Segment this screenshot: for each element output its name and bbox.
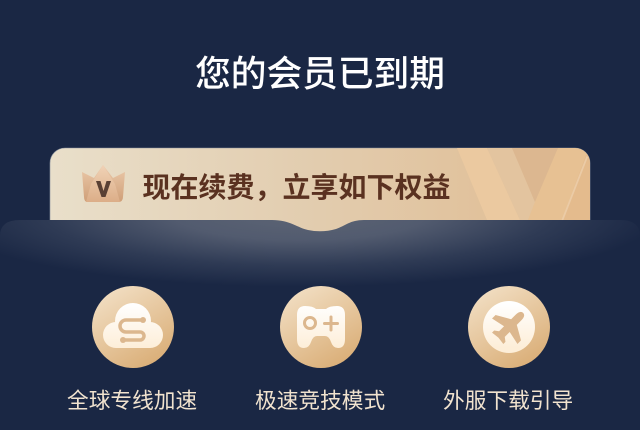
banner V decoration xyxy=(457,148,590,221)
title: 您的会员已到期 xyxy=(195,54,445,94)
icon: gamepad circle xyxy=(280,286,362,368)
icon: airplane circle xyxy=(468,286,550,368)
label: global lines: 全球专线加速 xyxy=(67,388,197,413)
label: download guide: 外服下载引导 xyxy=(443,388,573,413)
banner heading: 现在续费，立享如下权益 xyxy=(142,172,451,203)
icon: crown xyxy=(82,165,125,202)
label: game mode: 极速竞技模式 xyxy=(255,388,385,413)
panel: lower glow panel with notch xyxy=(0,220,640,300)
panel: renewal banner xyxy=(50,148,590,238)
icon: cloud circle xyxy=(92,286,174,368)
